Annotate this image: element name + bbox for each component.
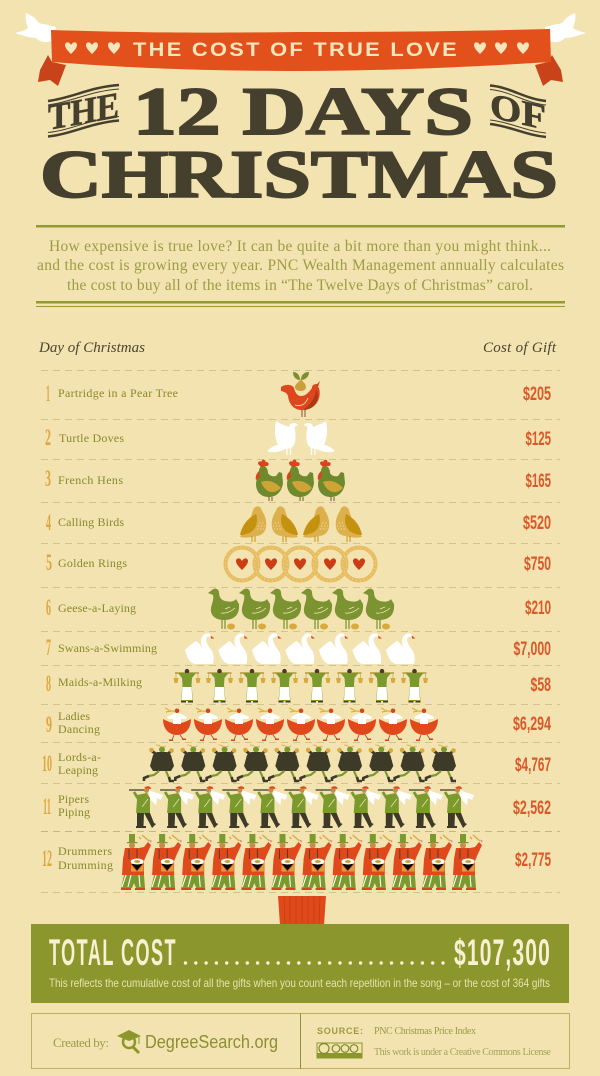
row 10: lords-a-leaping (42, 745, 551, 781)
row 10: lords-a-leaping: 10 (42, 751, 52, 776)
row 2: turtle doves: $125 (526, 428, 551, 450)
icon: three hens (256, 460, 345, 501)
intro text: the cost to buy all of the items in “The Twelve Days of Christmas” carol. (67, 277, 533, 294)
column heading: cost of gift: Cost of Gift (483, 340, 557, 356)
tree trunk (278, 896, 326, 925)
row 5: golden rings: 5 (46, 550, 52, 575)
row 6: geese-a-laying: $210 (525, 597, 551, 619)
icon: twelve drummers (121, 834, 483, 890)
ribbon left tail (38, 55, 66, 86)
icon: ten lords (144, 745, 456, 781)
ribbon right tail (535, 55, 563, 86)
ribbon (51, 29, 551, 71)
banner title: THE COST OF TRUE LOVE (133, 40, 459, 61)
row 5: golden rings: Golden Rings (58, 556, 127, 570)
row 3: french hens: French Hens (58, 473, 123, 487)
title: 12 days: 12 DAYS (133, 73, 473, 149)
icon: five rings (226, 548, 376, 580)
row 12: drummers drumming: Drummers (58, 844, 112, 858)
row 1: partridge in a pear tree: Partridge in a Pear Tree (58, 386, 178, 400)
degreesearch wordmark: DegreeSearch.org (145, 1032, 278, 1052)
row 4: calling birds: $520 (523, 512, 551, 534)
row 7: swans-a-swimming (46, 633, 551, 664)
row 8: maids-a-milking: $58 (530, 674, 551, 696)
title word: the: THE (48, 85, 119, 139)
icon: two doves (267, 421, 335, 455)
row 3: french hens (45, 460, 551, 501)
row 8: maids-a-milking: 8 (46, 671, 51, 696)
row 5: golden rings (46, 548, 551, 580)
icon: four birds (240, 506, 362, 542)
license text: This work is under a Creative Commons License (374, 1047, 552, 1058)
icon: degreesearch logo (117, 1030, 141, 1053)
title: christmas: CHRISTMAS (40, 136, 558, 212)
icon: six geese (208, 589, 394, 630)
row 6: geese-a-laying (46, 589, 551, 630)
icon: right dove (545, 13, 586, 42)
row 12: drummers drumming (42, 834, 551, 890)
row 1: partridge in a pear tree: 1 (46, 381, 50, 406)
row 12: drummers drumming: Drumming (58, 858, 113, 872)
icon: partridge and pear (281, 372, 320, 417)
row 1: partridge in a pear tree (46, 372, 551, 417)
row 2: turtle doves (45, 421, 551, 455)
panel: credits (32, 1013, 570, 1069)
row 3: french hens: 3 (45, 466, 51, 491)
main title (40, 73, 558, 212)
title word: of: OF (490, 85, 546, 138)
dot leader (186, 961, 448, 965)
row 12: drummers drumming: $2,775 (515, 849, 551, 871)
row 8: maids-a-milking (46, 669, 551, 702)
row 4: calling birds (46, 506, 551, 542)
row 10: lords-a-leaping: $4,767 (515, 754, 551, 776)
source text: PNC Christmas Price Index (374, 1026, 476, 1037)
panel: total cost: TOTAL COST (49, 932, 177, 973)
row 11: pipers piping: $2,562 (513, 797, 551, 819)
row 8: maids-a-milking: Maids-a-Milking (58, 675, 142, 689)
row 9: ladies dancing: $6,294 (513, 713, 551, 735)
row 10: lords-a-leaping: Leaping (58, 763, 98, 777)
right hearts (474, 42, 529, 54)
row 9: ladies dancing: Ladies (58, 709, 90, 723)
panel: total cost (31, 924, 569, 1003)
icon: seven swans (185, 633, 416, 664)
row 2: turtle doves: 2 (45, 425, 51, 450)
intro text: How expensive is true love? It can be quite a bit more than you might think... (49, 238, 551, 255)
row 7: swans-a-swimming: Swans-a-Swimming (58, 641, 157, 655)
row 4: calling birds: 4 (46, 510, 51, 535)
created by: Created by: (53, 1035, 109, 1050)
icon: eight maids (174, 669, 428, 702)
row 11: pipers piping (43, 786, 551, 828)
row 6: geese-a-laying: 6 (46, 595, 51, 620)
left hearts (65, 42, 120, 54)
row 9: ladies dancing (46, 708, 551, 741)
row 7: swans-a-swimming: 7 (46, 635, 51, 660)
row 9: ladies dancing: Dancing (58, 722, 100, 736)
row 11: pipers piping: 11 (43, 794, 51, 819)
column heading: day of christmas: Day of Christmas (38, 340, 145, 356)
icon: left dove (15, 13, 56, 42)
row 7: swans-a-swimming: $7,000 (514, 638, 551, 660)
icon: creative commons badge (317, 1043, 362, 1058)
source label: SOURCE: (317, 1026, 363, 1036)
row 9: ladies dancing: 9 (46, 712, 52, 737)
row 11: pipers piping: Pipers (58, 792, 89, 806)
intro text (37, 238, 564, 294)
row 12: drummers drumming: 12 (42, 846, 52, 871)
row 2: turtle doves: Turtle Doves (59, 431, 124, 445)
row 11: pipers piping: Piping (58, 805, 90, 819)
row 10: lords-a-leaping: Lords-a- (58, 750, 101, 764)
row 1: partridge in a pear tree: $205 (523, 383, 551, 405)
icon: eleven pipers (129, 786, 474, 828)
icon: nine ladies (163, 708, 438, 741)
row 4: calling birds: Calling Birds (58, 515, 124, 529)
top banner (15, 13, 586, 86)
row 5: golden rings: $750 (524, 553, 551, 575)
row 6: geese-a-laying: Geese-a-Laying (58, 601, 136, 615)
intro text: and the cost is growing every year. PNC Wealth Management annually calculates (37, 257, 564, 274)
row 3: french hens: $165 (526, 470, 551, 492)
